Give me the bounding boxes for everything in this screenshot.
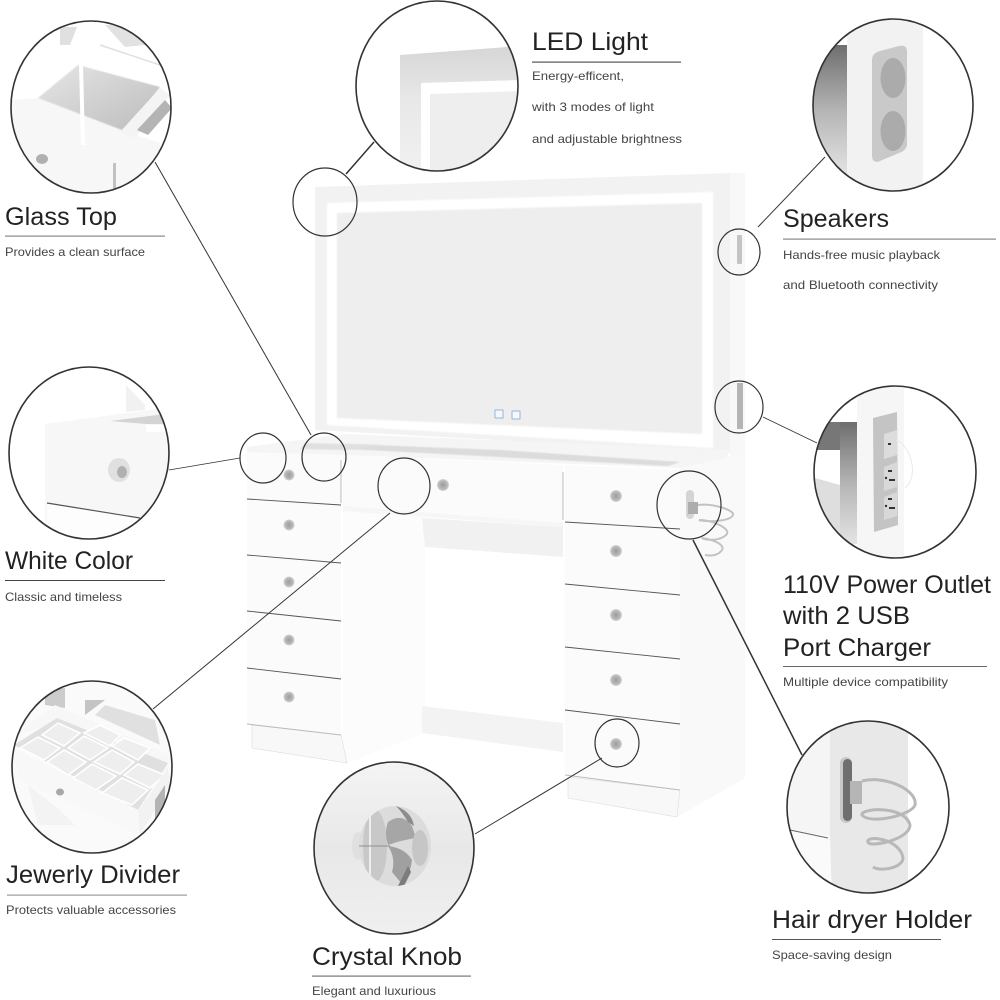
description: Space-saving design [772,948,892,962]
left plinth [252,725,347,763]
detail circle: LED corner [400,47,517,170]
heading rule [5,580,165,581]
back panel upper [422,518,563,557]
callout: speakers [783,15,996,292]
heading rule [312,976,471,977]
detail circle: white drawer [46,386,164,519]
callout connector lines [153,142,825,834]
callout: crystal knob [310,760,480,998]
right plinth [568,777,680,817]
centre drawer [343,455,563,523]
detail circle outline [813,19,973,191]
description: Protects valuable accessories [6,903,176,917]
heading rule [7,894,187,896]
heading: jewelry divider: Jewerly Divider [6,861,180,889]
heading: speakers: Speakers [783,205,889,233]
LED light strip [327,192,713,448]
touch control buttons [495,410,520,419]
glass top [247,434,730,468]
heading rule [783,666,987,667]
detail circle: hair dryer holder [788,722,917,892]
heading: glass top: Glass Top [5,203,117,231]
callout: glass top [5,20,172,256]
heading: power outlet: Port Charger [783,634,931,662]
description: Hands-free music playback [783,248,941,262]
callout: power outlet [782,380,991,689]
description [531,69,682,146]
detail circle outline [12,681,172,853]
speaker on side panel [737,235,742,264]
vanity desk illustration [247,173,745,817]
heading: power outlet: with 2 USB [782,602,910,630]
heading: power outlet: 110V Power Outlet [783,571,991,599]
drawer lines [247,499,680,724]
outlet on side panel [737,383,743,429]
left drawer tower [247,447,341,735]
description: Multiple device compatibility [783,675,948,689]
heading: crystal knob: Crystal Knob [312,943,462,971]
right drawer tower [565,465,680,790]
callout: LED light [350,0,682,180]
heading: LED light: LED Light [532,28,648,56]
description: Provides a clean surface [5,245,145,259]
detail circle outline [814,386,976,558]
callout: jewelry divider [0,675,187,917]
left inner leg [343,505,425,763]
callout: hair dryer holder [772,720,972,962]
mirror side panel [730,173,745,460]
detail circle outline [314,762,474,934]
description [783,248,941,292]
callout: white color [5,366,170,601]
detail circle: glass top [36,25,170,189]
detail circle outline [787,721,949,893]
detail circle outline [9,367,169,539]
mirror glass [337,203,702,434]
crystal knob body [359,806,431,886]
detail circle outline [11,21,171,193]
leg opening [425,547,563,723]
detail circle: speakers [814,20,923,190]
heading rule [5,236,165,237]
heading rule [772,939,941,940]
description: and adjustable brightness [532,132,682,146]
description: with 3 modes of light [531,100,655,114]
right tower side [677,455,745,817]
detail circle outline [356,1,518,171]
heading rule [532,62,681,63]
mirror frame [315,173,730,453]
detail circle: knob [314,763,474,933]
small hair dryer holder [686,490,733,555]
detail circle: outlet [815,387,913,557]
small marker circles [240,168,763,767]
drawer gap lines [247,460,680,790]
heading: power outlet [782,571,991,662]
heading: hair dryer holder: Hair dryer Holder [772,906,972,934]
description: Elegant and luxurious [312,984,436,998]
crystal knobs [284,470,622,750]
back panel lower [422,706,563,752]
description: and Bluetooth connectivity [783,278,938,292]
heading rule [783,238,996,240]
detail circle: jewelry tray [16,688,170,834]
heading: white color: White Color [5,547,133,575]
description: Energy-efficent, [532,69,624,83]
description: Classic and timeless [5,590,122,604]
